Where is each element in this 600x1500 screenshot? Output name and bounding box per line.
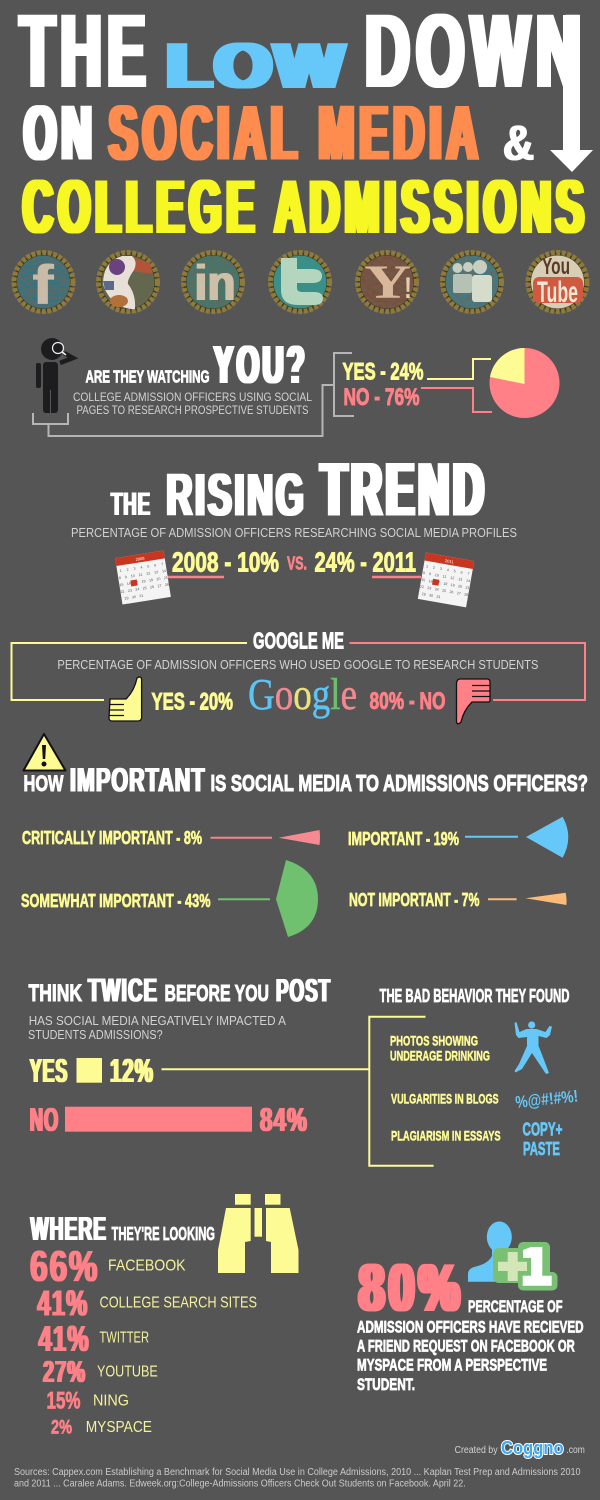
list: site names: NING	[93, 1392, 129, 1410]
title	[20, 0, 589, 250]
panel: are they watching	[33, 335, 560, 436]
yes no labels: YES - 24%	[342, 358, 424, 386]
icon: calendar 2011: 1 2 3 4 5 6 7	[426, 564, 470, 576]
title: &	[503, 115, 534, 171]
panel: rising trend	[71, 448, 517, 607]
yes 20 percent: YES - 20%	[152, 688, 233, 716]
icon: thumb up	[109, 677, 142, 721]
copy paste	[522, 1120, 562, 1159]
icon: calendar 2011	[418, 553, 474, 607]
frame lines	[12, 643, 247, 700]
heading: the rising trend	[111, 448, 488, 532]
list: percentages: 66%	[30, 1242, 99, 1291]
description text: STUDENTS ADMISSIONS?	[28, 1028, 163, 1042]
connector bracket	[162, 1017, 434, 1166]
pie chart	[490, 348, 560, 418]
icon: yahoo cap: !	[404, 272, 412, 305]
description text: PERCENTAGE OF ADMISSION OFFICERS RESEARCHING SOCIAL MEDIA PROFILES	[71, 525, 517, 540]
behavior list: UNDERAGE DRINKING	[390, 1048, 490, 1064]
list: site names: TWITTER	[100, 1330, 149, 1346]
icon: calendar 2011: 29 30 31	[421, 592, 441, 599]
credit	[455, 1437, 585, 1458]
heading: think twice	[28, 972, 331, 1008]
behavior list: PHOTOS SHOWING	[390, 1032, 478, 1048]
icon: youtube cap	[528, 252, 587, 312]
not important: NOT IMPORTANT - 7%	[349, 889, 480, 910]
heading: where they're looking: WHERE	[30, 1210, 107, 1247]
comparison figures: VS.	[287, 554, 307, 574]
important	[348, 817, 568, 858]
friend request text: STUDENT.	[357, 1376, 415, 1394]
heading: think twice: TWICE	[88, 972, 158, 1008]
list: site names: YOUTUBE	[97, 1364, 158, 1380]
yes no labels	[342, 358, 424, 411]
comparison figures: 2008 - 10%	[172, 546, 279, 578]
description text: COLLEGE ADMISSION OFFICERS USING SOCIAL	[73, 390, 312, 404]
credit: Coggno	[501, 1437, 564, 1458]
icon: twitter cap	[270, 252, 330, 312]
description text: HAS SOCIAL MEDIA NEGATIVELY IMPACTED A	[29, 1014, 287, 1028]
behavior list: PLAGIARISM IN ESSAYS	[391, 1128, 501, 1144]
credit: .com	[566, 1445, 585, 1456]
heading: where they're looking: THEY'RE LOOKING	[112, 1223, 215, 1244]
big figure 80 percent: 80%	[359, 1250, 464, 1326]
icon: calendar 2008	[115, 550, 171, 605]
heading: how important: HOW	[24, 771, 64, 796]
comparison figures: 24% - 2011	[314, 546, 416, 578]
leader lines	[427, 359, 491, 379]
description text: PAGES TO RESEARCH PROSPECTIVE STUDENTS	[76, 403, 308, 417]
yes no labels: NO - 76%	[344, 384, 420, 411]
arrow	[550, 15, 593, 172]
icon: calendar 2008: 8 9 10 11 12 13 14	[119, 569, 166, 580]
important: IMPORTANT - 19%	[348, 828, 459, 849]
icon: myspace cap	[442, 252, 502, 312]
icon: yahoo cap: Y	[364, 256, 411, 309]
heading: are they watching you: ARE THEY WATCHING	[86, 366, 210, 386]
heading: how important	[24, 762, 588, 800]
somewhat important	[21, 860, 318, 937]
icon: person with magnifier	[36, 338, 73, 413]
copy paste: PASTE	[523, 1139, 560, 1159]
icon: youtube cap: You	[542, 253, 570, 279]
list: percentages: 41%	[37, 1282, 88, 1324]
description text	[28, 1014, 287, 1042]
icon: calendar 2008: 29 30 31	[124, 594, 144, 601]
icon: add friend	[468, 1222, 558, 1290]
icon: linkedin cap: in	[194, 255, 236, 311]
panel: where they're looking	[30, 1194, 298, 1438]
no bar	[30, 1102, 308, 1139]
heading: google me: GOOGLE ME	[253, 628, 344, 654]
list: percentages: 15%	[46, 1388, 80, 1414]
copy paste: COPY+	[522, 1120, 562, 1140]
icon: calendar 2008: 15 16 17 18 19 20 21	[119, 576, 168, 587]
icon: binoculars	[218, 1194, 298, 1273]
list: site names: COLLEGE SEARCH SITES	[100, 1294, 257, 1312]
sources	[14, 1467, 581, 1490]
icon: facebook cap	[14, 252, 73, 316]
title: ON	[24, 88, 97, 176]
symbols: censored swearing: %@#!#%!	[514, 1086, 579, 1112]
panel: google me	[12, 628, 585, 724]
description text	[73, 390, 312, 417]
somewhat important: SOMEWHAT IMPORTANT - 43%	[21, 890, 210, 911]
icon: yahoo cap	[358, 252, 416, 312]
behavior list	[390, 1032, 501, 1144]
underlines	[167, 576, 421, 578]
connector bracket	[33, 353, 354, 436]
panel: how important	[21, 734, 588, 937]
list: site names: MYSPACE	[86, 1419, 152, 1436]
list: percentages: 2%	[51, 1418, 72, 1438]
list: site names: FACEBOOK	[108, 1258, 186, 1274]
icon: calendar 2011: 15 16 17 18 19 20 21	[421, 578, 470, 590]
list: percentages: 41%	[38, 1318, 90, 1359]
icon: calendar 2008: 2008	[135, 555, 146, 562]
icon: warning triangle	[24, 734, 66, 770]
list: percentages	[30, 1242, 99, 1438]
list: site names	[86, 1258, 257, 1436]
behavior list: VULGARITIES IN BLOGS	[391, 1090, 499, 1106]
sources: and 2011 ... Caralee Adams. Edweek.org:College-Admissions Officers Check Out Students on Facebook. April 22.	[14, 1478, 466, 1490]
friend request text	[357, 1298, 584, 1394]
no 80 percent: 80% - NO	[370, 688, 446, 715]
icon: facebook cap: f	[33, 253, 53, 316]
title: LOW	[167, 29, 347, 102]
google logo: Google	[248, 670, 357, 719]
heading: how important: IMPORTANT	[70, 762, 206, 800]
icon: calendar 2011: 8 9 10 11 12 13 14	[423, 571, 470, 583]
comparison figures	[172, 546, 416, 578]
icon: google cap	[98, 252, 158, 312]
heading: the rising trend: THE	[111, 486, 151, 522]
no bar: 84%	[260, 1102, 308, 1139]
social media bottle cap icons	[14, 252, 587, 316]
heading: are they watching you	[86, 335, 308, 395]
heading: are they watching you: YOU?	[214, 335, 308, 395]
yes bar: YES	[30, 1053, 68, 1090]
icon: celebrating figure	[514, 1021, 552, 1074]
credit: Created by	[455, 1445, 498, 1456]
heading: the rising trend: RISING	[166, 462, 306, 528]
heading: think twice: THINK	[28, 980, 82, 1007]
description text: PERCENTAGE OF ADMISSION OFFICERS WHO USED GOOGLE TO RESEARCH STUDENTS	[57, 658, 538, 672]
icon: thumb down	[456, 679, 490, 724]
heading: think twice: POST	[276, 972, 331, 1008]
panel: think twice	[28, 972, 579, 1166]
list: percentages: 27%	[43, 1354, 86, 1389]
panel: friend requests	[357, 1222, 584, 1394]
yes bar	[30, 1053, 154, 1090]
heading: think twice: BEFORE YOU	[164, 980, 269, 1006]
critically important: CRITICALLY IMPORTANT - 8%	[22, 827, 202, 848]
yes bar: 12%	[110, 1053, 154, 1090]
icon: calendar 2008: 22 23 24 25 26 27 28	[120, 583, 169, 594]
icon: calendar 2011: 2011	[445, 558, 455, 565]
icon: calendar 2011: 22 23 24 25 26 27 28	[420, 585, 469, 597]
no bar: NO	[30, 1102, 59, 1139]
icon: calendar 2008: 1 2 3 4 5 6 7	[119, 562, 163, 573]
